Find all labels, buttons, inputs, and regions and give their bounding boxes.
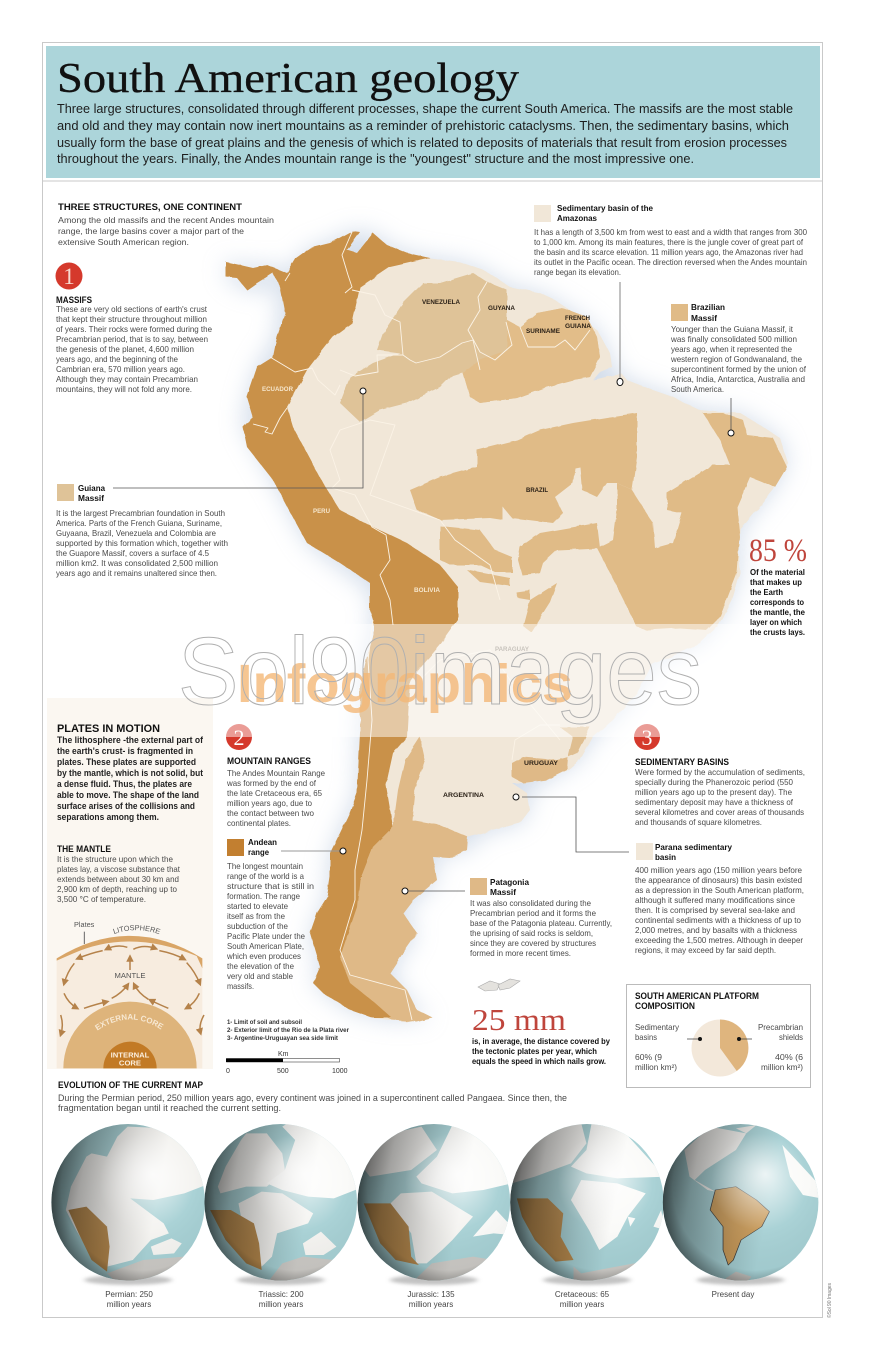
callout: Brazilian massif: Brazilian	[691, 302, 725, 312]
text block: plates in motion: by the mantle, which is not solid, but	[57, 768, 203, 778]
callout: Andean range: Andean	[248, 837, 277, 847]
text block: massifs: Cambrian era, 570 million years ago.	[56, 365, 185, 374]
callout: Amazonas basin: It has a length of 3,500 km from west to east and a width that ranges from 300	[534, 228, 807, 237]
globe captions: million years	[560, 1300, 604, 1309]
country labels: BRAZIL	[526, 488, 548, 494]
text block: plates in motion	[57, 723, 204, 822]
text block: sedimentary basins: and thousands of square kilometres.	[635, 818, 762, 827]
scale bar: 500	[277, 1068, 289, 1075]
country labels: VENEZUELA	[422, 300, 461, 306]
text block: three structures: extensive South American region.	[58, 238, 189, 247]
scale bar: 1000	[332, 1068, 348, 1075]
diagram: Earth layers and mantle convection: LITOSPHERE	[113, 925, 160, 934]
callout: 25 mm: the tectonic plates per year, which	[472, 1046, 597, 1056]
callout: Patagonia massif: Precambrian period and it forms the	[470, 909, 596, 918]
Guiana massif	[340, 273, 600, 422]
callout: Parana basin	[513, 794, 804, 955]
callout: Guiana massif: supported by this formation which, together with	[56, 539, 228, 548]
text block: mountain ranges: The Andes Mountain Range	[227, 769, 325, 778]
text block: sedimentary basins	[635, 757, 805, 827]
callout: Parana basin: then. It is comprised by several sea-lake and	[635, 906, 795, 915]
text block: mountain ranges: continental plates.	[227, 819, 291, 828]
globe: Triassic	[204, 1123, 360, 1283]
text block: evolution of the current map	[58, 1080, 567, 1113]
callout: 85 percent: that makes up	[750, 577, 802, 587]
text block: three structures	[58, 202, 274, 247]
callout: Parana basin: the appearance of dinosaurs) this basin existed	[635, 876, 802, 885]
country labels: SURINAME	[526, 329, 560, 335]
callout: Parana basin: exceeding the 1,500 metres. Although in deeper	[635, 936, 803, 945]
text block: evolution of the current map: EVOLUTION OF THE CURRENT MAP	[58, 1080, 203, 1090]
text block: massifs: that kept their structure throughout million	[56, 315, 207, 324]
text block: sedimentary basins: sedimentary deposit may have a thickness of	[635, 798, 794, 807]
callout: Patagonia massif: base of the Patagonia plateau. Currently,	[470, 919, 612, 928]
callout: Andean range: Pacific Plate under the	[227, 932, 305, 941]
panel: platform composition pie chart	[626, 984, 810, 1088]
callout: Parana basin: Parana sedimentary	[655, 842, 732, 852]
diagram: Earth layers and mantle convection: CORE	[119, 1059, 141, 1068]
callout: 85 percent: layer on which	[750, 617, 802, 627]
header panel	[46, 46, 820, 178]
text block: plates in motion: plates. These plates are supported	[57, 757, 196, 767]
country labels: PERU	[313, 509, 330, 515]
diagram: Earth layers and mantle convection: Plates	[74, 920, 95, 929]
callout: Patagonia massif: since they are covered by structures	[470, 939, 596, 948]
map notes: 3- Argentine-Uruguayan sea side limit	[227, 1035, 338, 1042]
text block: the mantle: THE MANTLE	[57, 844, 111, 854]
text block: sedimentary basins: specially during the Phanerozoic period (550	[635, 778, 793, 787]
text block: the mantle: extends between about 30 km and	[57, 875, 179, 884]
callout: 25 mm	[472, 1002, 610, 1066]
text block: plates in motion: surface arises of the collisions and	[57, 801, 195, 811]
text block: massifs: of years. Their rocks were formed during the	[56, 325, 212, 334]
globe captions: million years	[107, 1300, 151, 1309]
callout: Guiana massif: Massif	[78, 493, 104, 503]
callout: Brazilian massif: western region of Gondwanaland, the	[670, 355, 802, 364]
continent: sedimentary basin base	[226, 231, 788, 1022]
text block: evolution of the current map: During the Permian period, 250 million years ago, every continent was joined in a supercontinent called Pangaea. Since then, the	[58, 1093, 567, 1103]
text block: plates in motion: separations among them.	[57, 812, 159, 822]
callout: Parana basin: basin	[655, 852, 676, 862]
text block: three structures: Among the old massifs and the recent Andes mountain	[58, 216, 274, 225]
country labels: PARAGUAY	[495, 647, 529, 653]
callout: Amazonas basin: to 1,000 km. Among its main features, there is the jungle cover of great part of	[534, 238, 804, 247]
callout: Guiana massif: Guyaana, Brazil, Venezuela and Colombia are	[56, 529, 216, 538]
text block: plates in motion: PLATES IN MOTION	[57, 723, 160, 735]
globe: Jurassic	[357, 1123, 512, 1283]
text block: massifs: MASSIFS	[56, 295, 92, 305]
callout: Amazonas basin	[534, 203, 807, 386]
callout: 85 percent: Of the material	[750, 567, 805, 577]
scale bar	[226, 1051, 348, 1075]
text block: massifs: mountains, they will not fold any more.	[56, 385, 192, 394]
callout: Brazilian massif: Africa, India, Antarctica, Australia and	[671, 375, 805, 384]
text block: sedimentary basins: SEDIMENTARY BASINS	[635, 757, 729, 767]
country borders	[253, 232, 590, 1020]
text block: massifs: Precambrian period, that is to say, between	[56, 335, 208, 344]
panel: platform composition pie chart: SOUTH AMERICAN PLATFORM	[635, 991, 759, 1001]
Patagonia massif	[330, 737, 468, 1022]
globes row	[50, 1123, 821, 1285]
text block: sedimentary basins: Were formed by the accumulation of sediments,	[635, 768, 805, 777]
text block: evolution of the current map: fragmentation began until it reached the current setting.	[58, 1103, 281, 1113]
callout: Guiana massif: It is the largest Precambrian foundation in South	[56, 509, 225, 518]
callout: Brazilian massif: years ago, when it represented the	[671, 345, 792, 354]
callout: 85 percent	[749, 533, 807, 637]
globe: Present day	[661, 1123, 821, 1283]
callout: Andean range: range of the world is a	[227, 872, 304, 881]
callout: Patagonia massif: the uprising of said rocks is seldom,	[470, 929, 593, 938]
Falkland islands	[478, 979, 520, 991]
callout: Andean range: the elevation of the	[227, 962, 294, 971]
icon: number 1 badge: 1	[63, 264, 75, 289]
callout: Andean range: itself as from the	[227, 912, 285, 921]
text block: mountain ranges: MOUNTAIN RANGES	[227, 756, 311, 766]
globe captions: Cretaceous: 65	[555, 1290, 610, 1299]
callout: Patagonia massif	[402, 877, 612, 958]
globe captions: million years	[409, 1300, 453, 1309]
intro text: throughout the years. Finally, the Andes mountain range is the "youngest" structure and the most impressive one.	[57, 152, 694, 166]
callout: Andean range: started to elevate	[227, 902, 288, 911]
callout: Patagonia massif: Patagonia	[490, 877, 529, 887]
text block: plates in motion: a dense fluid. Thus, the plates are	[57, 779, 192, 789]
country labels: BOLIVIA	[414, 588, 441, 594]
map notes: 2- Exterior limit of the Rio de la Plata river	[227, 1027, 350, 1034]
panel: plates in motion background	[47, 698, 213, 1069]
text block: massifs: Although they may contain Precambrian	[56, 375, 198, 384]
text block: three structures: THREE STRUCTURES, ONE CONTINENT	[58, 202, 243, 212]
text block: mountain ranges	[226, 756, 325, 828]
callout: 25 mm: is, in average, the distance covered by	[472, 1036, 610, 1046]
Uruguay massif	[512, 757, 568, 783]
callout: Guiana massif: the Guapore Massif, covers a surface of 4.5	[56, 549, 209, 558]
icon: number 3 badge: 3	[642, 725, 652, 750]
callout: Andean range: range	[248, 847, 269, 857]
callout: Brazilian massif	[670, 302, 807, 436]
callout: Amazonas basin: range began its elevation.	[534, 268, 621, 277]
callout: Amazonas basin: Sedimentary basin of the	[557, 203, 653, 213]
text block: the mantle: 2,900 km of depth, reaching up to	[57, 885, 177, 894]
callout: Patagonia massif: It was also consolidated during the	[470, 899, 591, 908]
text block: sedimentary basins: million years ago up to the present day). The	[635, 788, 792, 797]
callout: Guiana massif: America. Parts of the French Guiana, Suriname,	[56, 519, 222, 528]
text block: massifs: These are very old sections of earth's crust	[56, 305, 208, 314]
title: South American geology	[57, 56, 519, 102]
country labels: ARGENTINA	[443, 793, 485, 799]
panel: platform composition pie chart: million km²)	[635, 1063, 677, 1072]
map notes	[227, 1019, 350, 1042]
globe captions: Jurassic: 135	[407, 1290, 455, 1299]
text block: plates in motion: the earth's crust- is fragmented in	[57, 746, 193, 756]
callout: 85 percent: the Earth	[750, 587, 783, 597]
map notes: 1- Limit of soil and subsoil	[227, 1019, 302, 1026]
diagram: Earth layers and mantle convection: MANTLE	[114, 971, 146, 980]
country labels: GUIANA	[565, 324, 592, 330]
callout: Brazilian massif: Massif	[691, 313, 717, 323]
Brazilian massif west	[410, 413, 637, 523]
callout: Amazonas basin: its outlet in the Pacific ocean. The direction reversed when the Andes mountain	[534, 258, 807, 267]
Brazilian massif east	[597, 413, 787, 630]
callout: Brazilian massif: South America.	[671, 385, 724, 394]
text block: the mantle: It is the structure upon which the	[57, 855, 173, 864]
callout: Andean range: formation. The range	[227, 892, 300, 901]
globe: Permian	[50, 1123, 210, 1283]
callout: 85 percent: corresponds to	[750, 597, 804, 607]
callout: Guiana massif	[56, 388, 366, 578]
panel: platform composition pie chart: COMPOSITION	[635, 1001, 695, 1011]
intro text: Three large structures, consolidated through different processes, shape the current South America. The massifs are the most stable	[57, 102, 793, 116]
icon: number 2 badge	[226, 724, 252, 750]
globe captions: Triassic: 200	[258, 1290, 304, 1299]
callout: 25 mm: 25 mm	[472, 1002, 566, 1037]
globe captions: Permian: 250	[105, 1290, 153, 1299]
text block: the mantle: plates lay, a viscose substance that	[57, 865, 181, 874]
panel: platform composition pie chart: Precambrian	[758, 1023, 803, 1032]
country labels: GUYANA	[488, 306, 516, 312]
text block: the mantle: 3,500 °C of temperature.	[57, 895, 146, 904]
callout: Amazonas basin: Amazonas	[557, 213, 597, 223]
callout: Brazilian massif: supercontinent formed by the union of	[671, 365, 807, 374]
callout: Andean range: structure that is still in	[227, 882, 314, 891]
map of South America	[226, 231, 788, 1022]
callout: Patagonia massif: formed in more recent times.	[470, 949, 571, 958]
country labels: URUGUAY	[524, 761, 558, 767]
callout: Andean range: which even produces	[226, 952, 301, 961]
country labels	[262, 300, 592, 799]
intro text: usually form the base of great plains and the genesis of which is related to deposits of materials that result from erosion processes	[57, 136, 787, 150]
watermark band	[213, 624, 822, 737]
text block: massifs: years ago, and the beginning of the	[56, 355, 178, 364]
callout: Parana basin: although it suffered many modifications since	[635, 896, 795, 905]
callout: Andean range: The longest mountain	[227, 862, 303, 871]
callout: Parana basin: continental sediments with a thickness of up to	[635, 916, 801, 925]
text block: massifs	[56, 295, 212, 394]
text block: plates in motion: The lithosphere -the external part of	[57, 735, 204, 745]
panel: platform composition pie chart: shields	[779, 1033, 803, 1042]
Brazilian massif central band	[518, 523, 600, 575]
scale bar: 0	[226, 1068, 230, 1075]
text block: mountain ranges: was formed by the end of	[226, 779, 317, 788]
callout: Parana basin: regions, it may exceed by far said depth.	[635, 946, 776, 955]
callout: Parana basin: 2,000 metres, and by basalts with a thickness	[635, 926, 797, 935]
icon: number 2 badge: 2	[234, 725, 244, 750]
text block: massifs: the genesis of the planet, 4,600 million	[56, 345, 194, 354]
callout: Andean range: subduction of the	[227, 922, 288, 931]
callout: Andean range: very old and stable	[227, 972, 293, 981]
text block: sedimentary basins: several kilometres and cover areas of thousands	[635, 808, 804, 817]
callout: 85 percent: 85 %	[749, 533, 807, 569]
diagram: Earth layers and mantle convection	[56, 920, 205, 1068]
text block: mountain ranges: the late Cretaceous era, 65	[227, 789, 322, 798]
callout: Parana basin: 400 million years ago (150 million years before	[635, 866, 802, 875]
callout: Brazilian massif: was finally consolidated 500 million	[670, 335, 797, 344]
callout: Guiana massif: million km2. It was consolidated 2,500 million	[56, 559, 218, 568]
country labels: ECUADOR	[262, 387, 294, 393]
icon: number 3 badge	[634, 724, 660, 750]
callout: Guiana massif: Guiana	[78, 483, 105, 493]
callout: 85 percent: the mantle, the	[750, 607, 805, 617]
watermark: Infographics: Infographics	[237, 654, 573, 714]
Brazilian massif south-west blobs	[440, 526, 557, 632]
watermark: Sol90images: Sol90images	[178, 618, 702, 725]
callout: Patagonia massif: Massif	[490, 887, 516, 897]
diagram: Earth layers and mantle convection: EXTERNAL CORE	[94, 1014, 164, 1030]
callout: Andean range: South American Plate,	[227, 942, 304, 951]
callout: 85 percent: the crusts lays.	[750, 627, 805, 637]
intro text: and old and they may contain now inert mountains as a reminder of prehistoric cataclysms. Then, the sedimentary basins, which	[57, 119, 789, 133]
text block: mountain ranges: million years ago, due to	[227, 799, 312, 808]
country labels: FRENCH	[565, 316, 590, 322]
callout: Amazonas basin: the basin and its scarce elevation. 11 million years ago, the Amazonas river had	[534, 248, 803, 257]
callout: Guiana massif: years ago and it remains unaltered since then.	[56, 569, 217, 578]
globe captions: million years	[259, 1300, 303, 1309]
panel: platform composition pie chart: basins	[635, 1033, 657, 1042]
panel: platform composition pie chart: 60% (9	[635, 1053, 662, 1062]
diagram: Earth layers and mantle convection: INTERNAL	[111, 1050, 150, 1059]
callout: Andean range	[226, 837, 346, 991]
callout: Andean range: massifs.	[227, 982, 254, 991]
Andean range layer	[226, 231, 458, 1018]
callout: Parana basin: as a depression in the South American platform,	[635, 886, 804, 895]
panel: platform composition pie chart: 40% (6	[775, 1053, 803, 1062]
callout: Brazilian massif: Younger than the Guiana Massif, it	[671, 325, 794, 334]
globe: Cretaceous	[509, 1123, 665, 1283]
panel: platform composition pie chart: Sedimentary	[635, 1023, 680, 1032]
scale bar: Km	[278, 1051, 289, 1058]
callout: 25 mm: equals the speed in which nails grow.	[472, 1056, 606, 1066]
copyright: ©Sol 90 Images	[826, 1282, 833, 1318]
pie chart	[692, 1020, 748, 1076]
icon: number 1 badge	[56, 262, 82, 290]
text block: mountain ranges: the contact between two	[227, 809, 314, 818]
globe captions: Present day	[712, 1290, 754, 1299]
text block: three structures: range, the large basins cover a major part of the	[58, 227, 244, 236]
text block: the mantle	[57, 844, 181, 904]
panel: platform composition pie chart: million km²)	[761, 1063, 803, 1072]
globe captions	[105, 1290, 754, 1309]
intro text	[57, 102, 793, 166]
text block: plates in motion: able to move. The shape of the land	[57, 790, 199, 800]
